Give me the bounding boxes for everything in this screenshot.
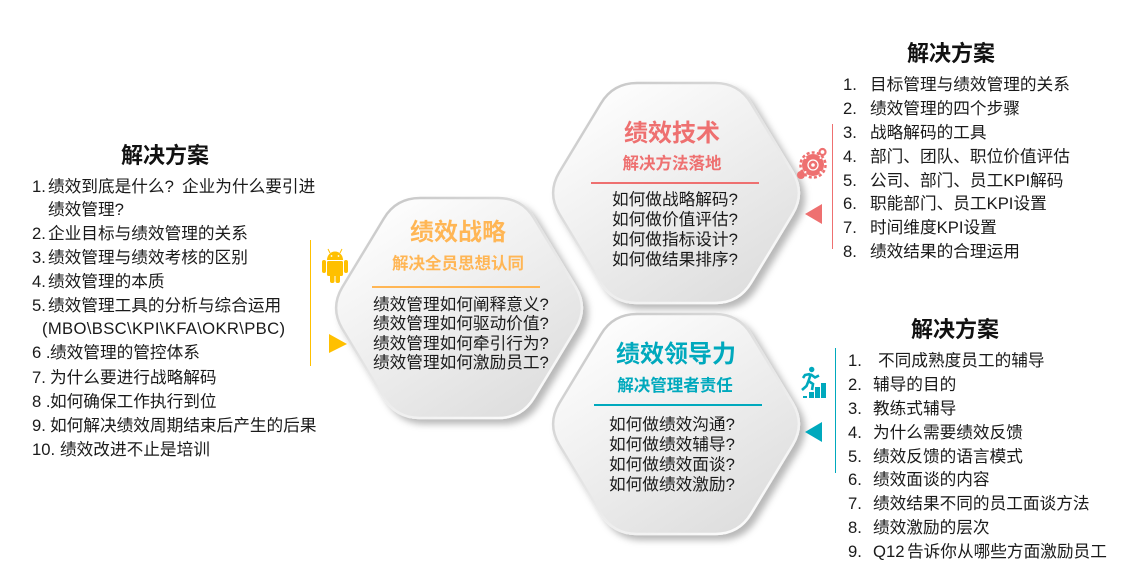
questions: 如何做结果排序? [612,250,738,269]
text block: leadership list: 9. [848,542,862,561]
divider: leadership connector line [835,348,836,473]
text block: technology list: 8. [843,242,857,261]
subtitle: 解决管理者责任 [617,375,733,395]
text block: technology list: 时间维度KPI设置 [870,218,997,237]
panel: technology solutions list [843,41,1070,261]
text block: left list: 4. [32,272,46,291]
text block: left list: 10. [32,440,55,459]
panel: hexagon leadership [553,314,799,534]
text block: technology list: 3. [843,123,857,142]
text block: leadership list: 教练式辅导 [873,399,956,418]
text block: leadership list: 告诉你从哪些方面激励员工 [907,542,1107,561]
subtitle: 解决全员思想认同 [392,253,524,273]
icon: runner on bars [802,367,826,398]
text block: left list: 如何解决绩效周期结束后产生的后果 [50,416,317,435]
text block: leadership list: 绩效激励的层次 [873,518,990,537]
text block: left list [32,177,317,459]
text block: technology list: 4. [843,147,857,166]
text block: leadership list: 为什么需要绩效反馈 [873,423,1023,442]
text block: leadership list [848,351,1107,561]
text block: technology list: 6. [843,194,857,213]
text block: leadership list: 3. [848,399,862,418]
text block: leadership list: 8. [848,518,862,537]
questions [612,190,738,269]
heading: technology solutions: 解决方案 [907,41,995,66]
text block: left list: 3. [32,248,46,267]
panel: leadership solutions list [848,317,1107,561]
text block: technology list: 目标管理与绩效管理的关系 [870,75,1070,94]
text block: left list: 9. [32,416,46,435]
text block: left list: 绩效管理? [48,200,124,219]
text block: left list: 为什么要进行战略解码 [50,368,217,387]
panel: hexagon technology [553,83,799,303]
text block: left list: 如何确保工作执行到位 [50,392,217,411]
text block: technology list: 战略解码的工具 [870,123,987,142]
text block: technology list: 5. [843,171,857,190]
title: 绩效技术 [624,120,720,147]
text block: left list: 7. [32,368,46,387]
hexagon shape [553,83,799,303]
text block: left list: 8 . [32,392,51,411]
text block: left list: 绩效管理的本质 [48,272,165,291]
questions: 如何做价值评估? [612,210,738,229]
questions: 如何做绩效激励? [609,475,735,494]
title: 绩效战略 [410,219,506,246]
text block: left list: 企业目标与绩效管理的关系 [48,224,248,243]
questions: 绩效管理如何驱动价值? [373,314,549,333]
title: 绩效领导力 [616,341,736,368]
text block: left list: 企业为什么要引进 [182,177,316,196]
text block: leadership list: 2. [848,375,862,394]
questions: 如何做绩效辅导? [609,435,735,454]
icon: gears [797,149,826,179]
questions: 如何做战略解码? [612,190,738,209]
text block: left list: 绩效管理工具的分析与综合运用 [48,296,281,315]
divider: technology connector line [832,124,833,249]
text block: left list: 绩效改进不止是培训 [60,440,210,459]
hexagon shape [553,314,799,534]
questions [373,295,549,372]
questions: 如何做绩效面谈? [609,455,735,474]
text block: technology list: 7. [843,218,857,237]
text block: leadership list: Q12 [873,542,904,561]
text block: left list: 绩效管理与绩效考核的区别 [48,248,248,267]
questions: 绩效管理如何牵引行为? [373,334,549,353]
subtitle: 解决方法落地 [622,153,722,173]
text block: leadership list: 辅导的目的 [873,375,956,394]
questions: 绩效管理如何激励员工? [373,353,549,372]
text block: technology list: 部门、团队、职位价值评估 [870,147,1070,166]
text block: technology list: 2. [843,99,857,118]
text block: leadership list: 6. [848,470,862,489]
rule [372,286,540,288]
heading: left solutions: 解决方案 [121,143,209,168]
panel: left solutions list [32,143,317,459]
text block: left list: 6 . [32,343,51,362]
text block: left list: 绩效管理的管控体系 [50,343,200,362]
text block: technology list: 1. [843,75,857,94]
text block: leadership list: 7. [848,494,862,513]
rule [591,182,759,184]
arrow: technology [805,204,822,224]
questions [609,415,735,494]
questions: 绩效管理如何阐释意义? [373,295,549,314]
text block: technology list: 公司、部门、员工KPI解码 [870,171,1063,190]
questions: 如何做指标设计? [612,230,738,249]
questions: 如何做绩效沟通? [609,415,735,434]
text block: left list: 1. [32,177,46,196]
text block: leadership list: 4. [848,423,862,442]
text block: technology list [843,75,1070,261]
text block: technology list: 绩效管理的四个步骤 [870,99,1020,118]
text block: leadership list: 5. [848,447,862,466]
rule [594,404,762,406]
text block: left list: 2. [32,224,46,243]
arrow: leadership [805,422,822,442]
hexagon shape [336,198,582,418]
text block: technology list: 绩效结果的合理运用 [870,242,1020,261]
text block: left list: 5. [32,296,46,315]
text block: leadership list: 绩效面谈的内容 [873,470,990,489]
icon: android [322,249,348,283]
text block: leadership list: 1. [848,351,862,370]
text block: left list: 绩效到底是什么? [48,177,174,196]
text block: leadership list: 不同成熟度员工的辅导 [878,351,1045,370]
divider: left connector line [310,240,311,366]
panel: hexagon strategy [336,198,582,418]
text block: leadership list: 绩效结果不同的员工面谈方法 [873,494,1090,513]
text block: left list: (MBO\BSC\KPI\KFA\OKR\PBC) [42,319,285,338]
text block: leadership list: 绩效反馈的语言模式 [873,447,1023,466]
heading: leadership solutions: 解决方案 [911,317,999,342]
arrow: left [329,334,347,353]
text block: technology list: 职能部门、员工KPI设置 [870,194,1047,213]
